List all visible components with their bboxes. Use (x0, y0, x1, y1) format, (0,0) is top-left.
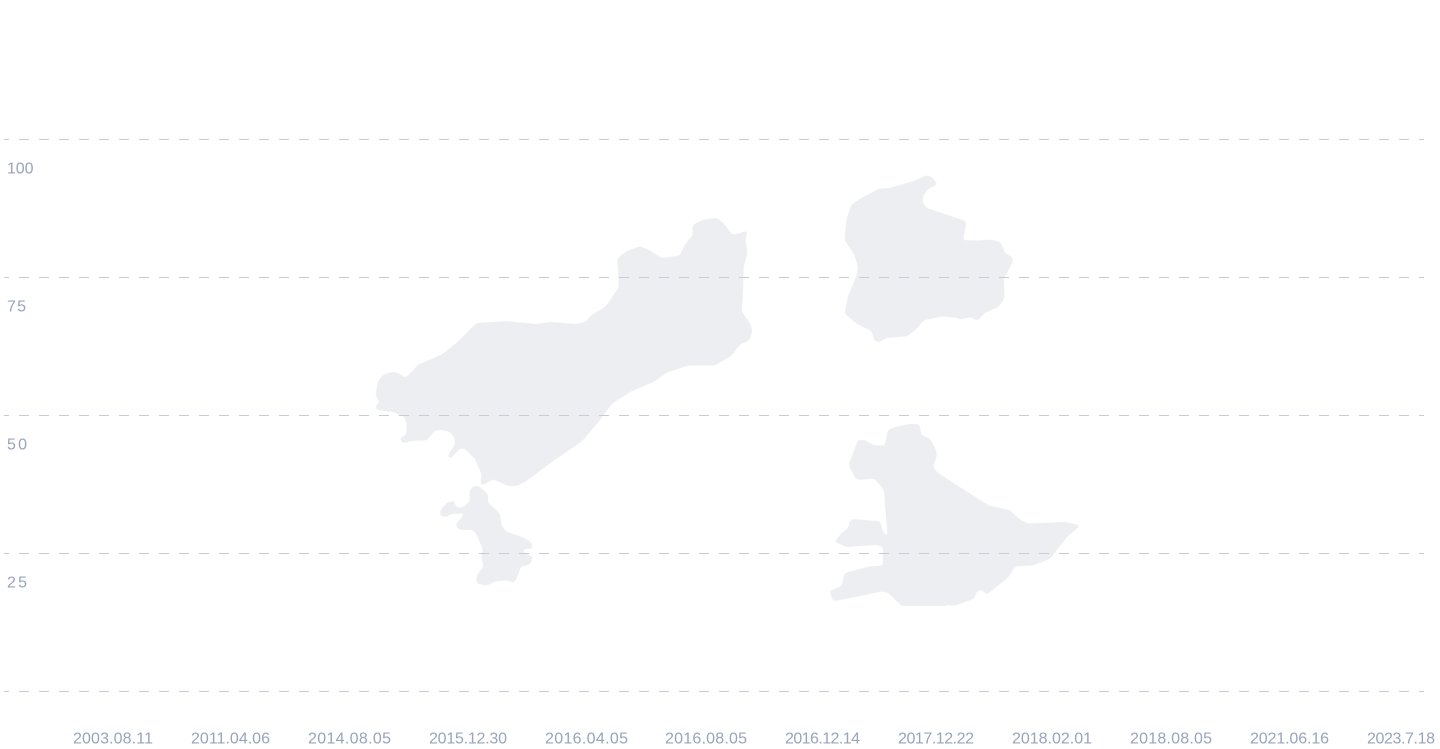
map shapes (375, 176, 1080, 606)
x axis labels: 2017.12.22 (898, 730, 974, 748)
x axis labels: 2016.08.05 (665, 730, 747, 748)
shape: small island (440, 486, 533, 585)
x axis labels: 2016.04.05 (545, 730, 628, 748)
y axis labels: 25 (7, 574, 27, 592)
y axis labels: 50 (7, 436, 27, 454)
x axis labels: 2018.02.01 (1012, 730, 1092, 748)
x axis labels: 2015.12.30 (429, 730, 507, 748)
x axis labels: 2016.12.14 (785, 730, 860, 748)
x axis labels: 2023.7.18 (1367, 730, 1435, 748)
x axis labels: 2014.08.05 (308, 730, 391, 748)
x axis labels: 2003.08.11 (73, 730, 153, 748)
y axis labels: 75 (7, 298, 26, 316)
shape: large island (375, 218, 752, 486)
x axis labels (73, 730, 1435, 748)
x axis labels: 2018.08.05 (1130, 730, 1212, 748)
y axis labels (7, 160, 34, 592)
shape: upper right island (845, 176, 1013, 342)
y axis labels: 100 (7, 160, 34, 178)
x axis labels: 2021.06.16 (1250, 730, 1329, 748)
x axis labels: 2011.04.06 (191, 730, 270, 748)
shape: lower right island (830, 424, 1080, 606)
